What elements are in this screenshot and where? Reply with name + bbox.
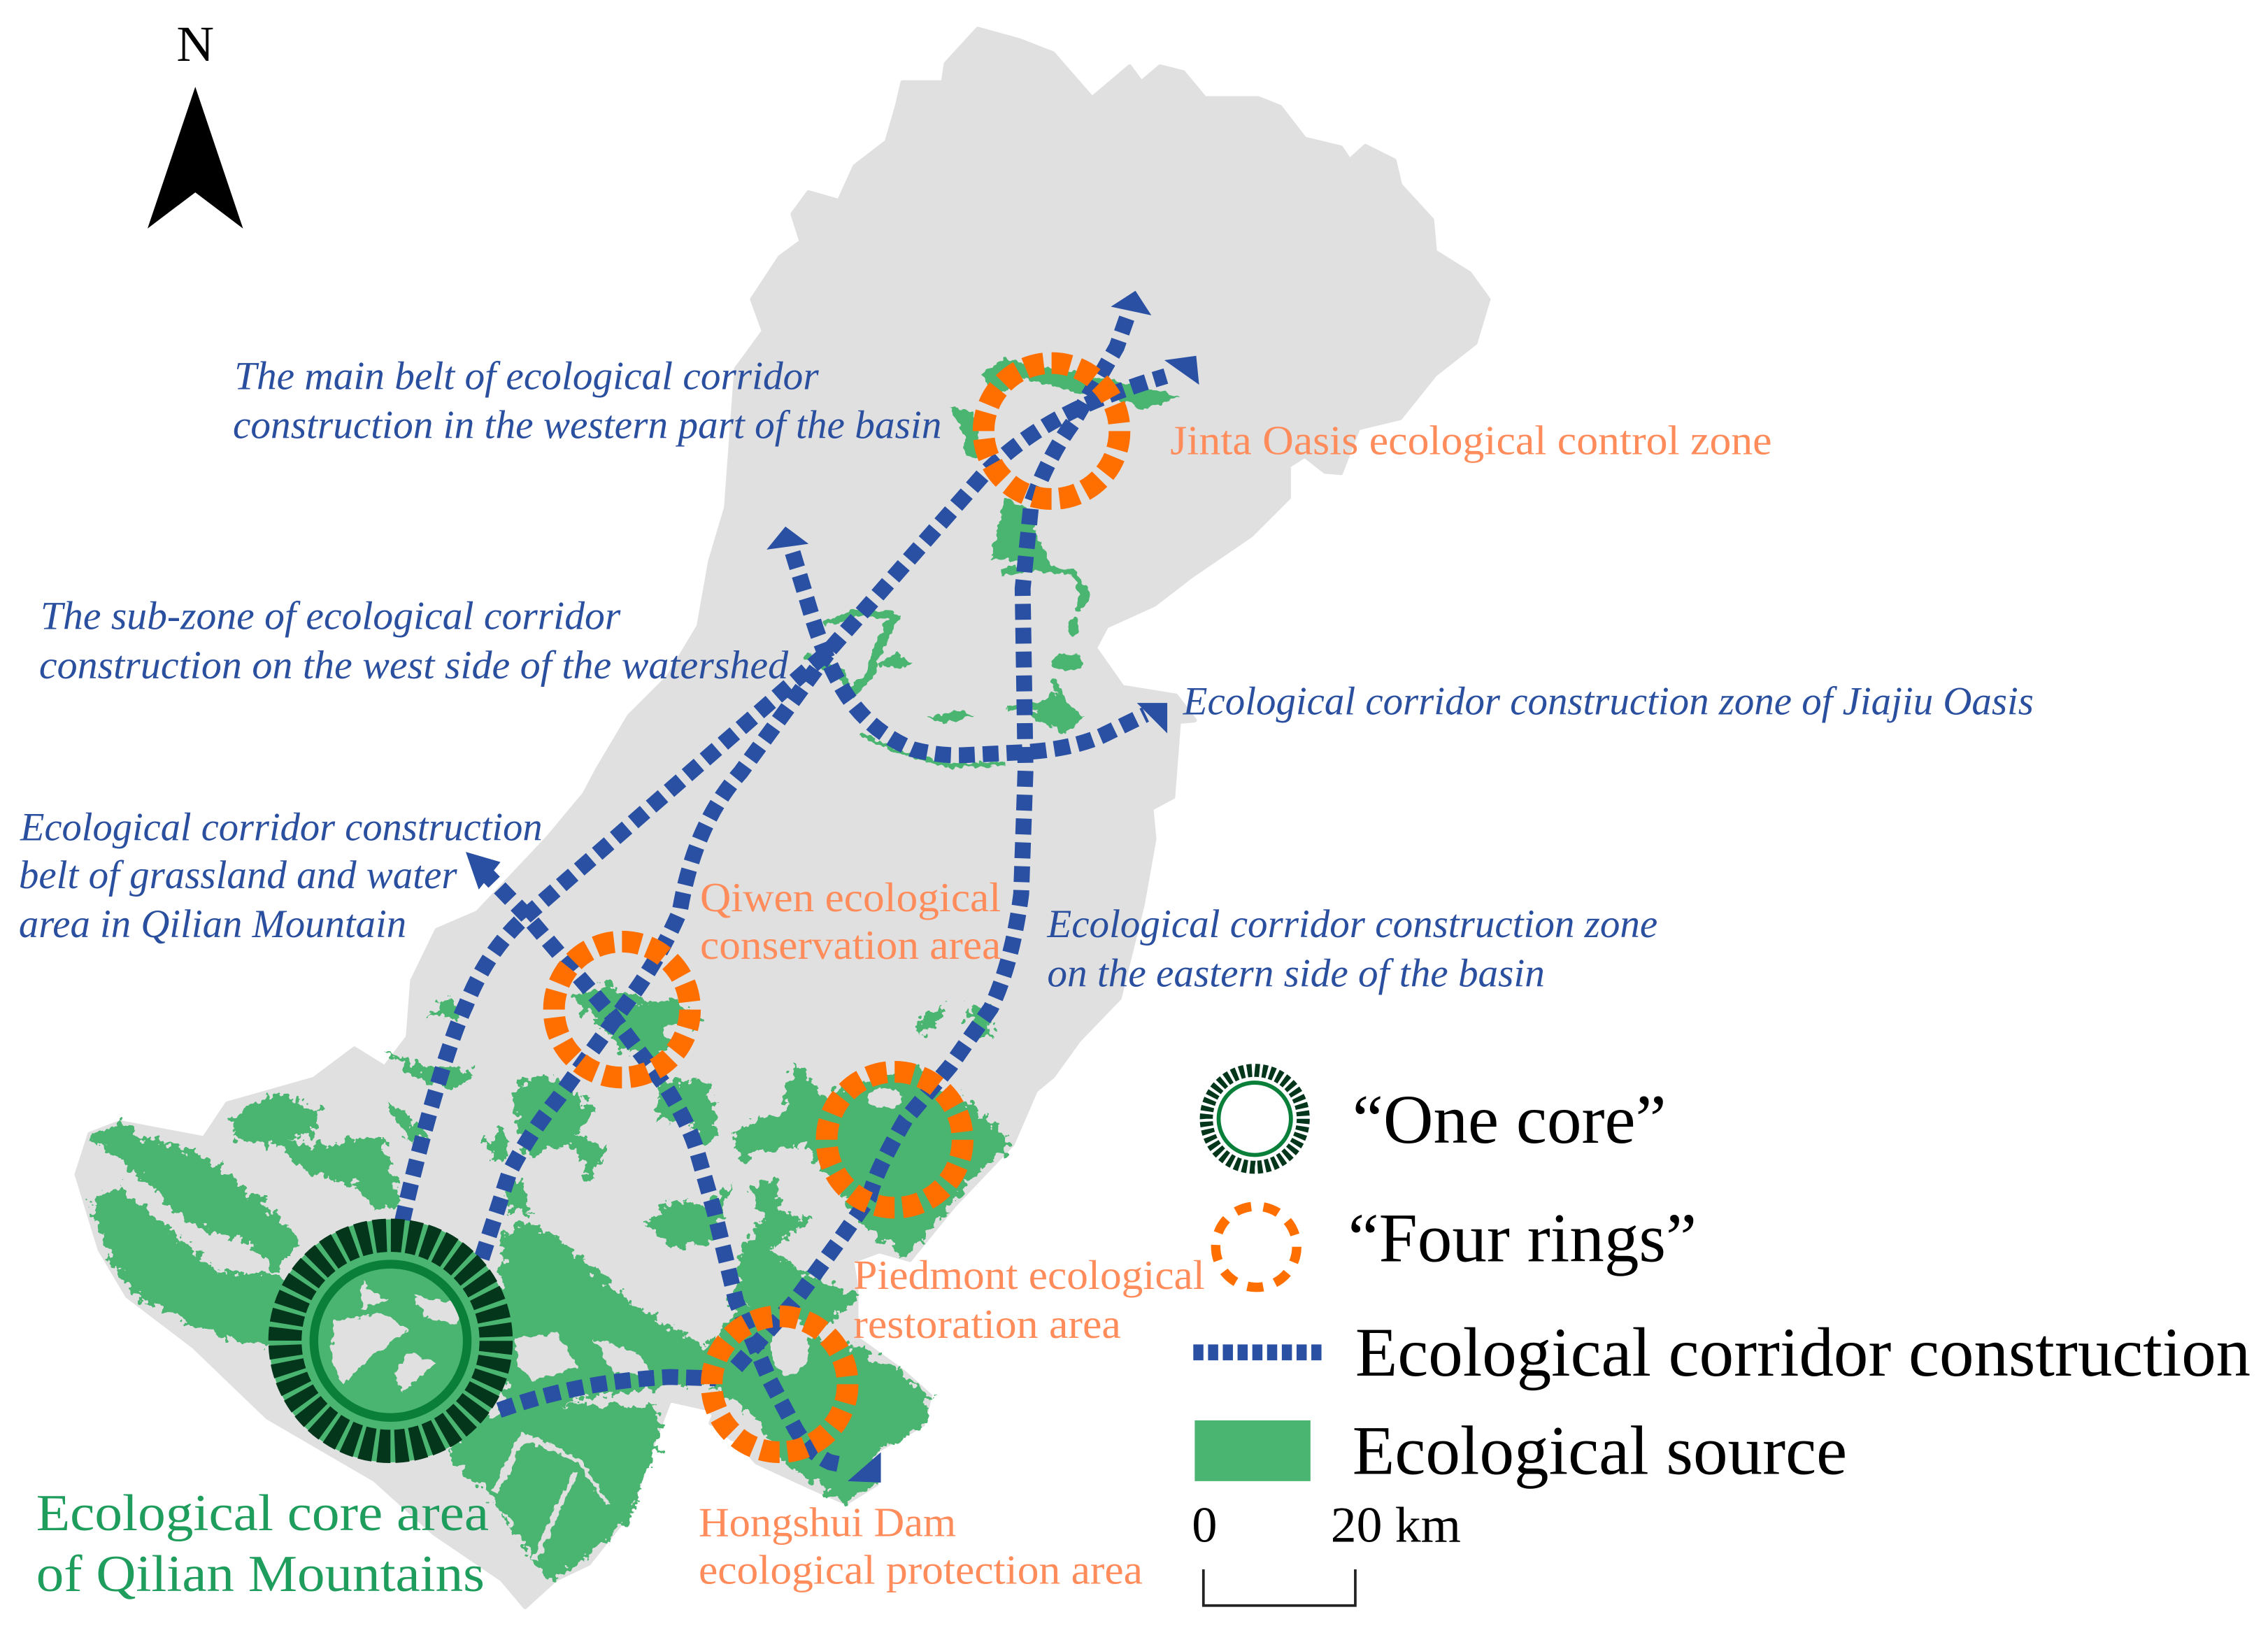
label: ecological core area: Ecological core area	[36, 1485, 489, 1542]
label: grassland and water belt: Ecological corridor construction	[20, 806, 543, 850]
label: grassland and water belt: area in Qilian Mountain	[19, 902, 406, 946]
label: sub-zone west of watershed: The sub-zone of ecological corridor	[41, 594, 621, 639]
label: main belt western basin: The main belt of ecological corridor	[234, 354, 819, 398]
four rings: Hongshui Dam ring	[712, 1316, 848, 1452]
legend: ecological corridor construction: Ecological corridor construction	[1355, 1315, 2251, 1391]
label: eastern basin corridor zone: on the eastern side of the basin	[1047, 952, 1545, 996]
one core: Qilian Mountains core ring	[269, 1219, 512, 1462]
legend: one core	[1206, 1070, 1667, 1167]
label: Qiwen conservation area: Qiwen ecological	[700, 874, 1001, 920]
four rings: Piedmont ring	[827, 1072, 962, 1208]
finer oasis patches	[806, 359, 1181, 765]
label: ecological core area: of Qilian Mountains	[36, 1546, 485, 1603]
icon: north arrow	[148, 16, 243, 229]
label: main belt western basin	[233, 354, 941, 448]
label: Piedmont restoration area	[853, 1252, 1205, 1347]
legend: four rings	[1215, 1200, 1697, 1288]
map: grey gaps inside ecological sources	[173, 1024, 903, 1560]
map: study area basin outline	[77, 29, 1488, 1607]
label: Hongshui Dam protection area: ecological protection area	[699, 1547, 1143, 1593]
corridors: ecological corridor construction lines	[402, 318, 1166, 1465]
label: Hongshui Dam protection area	[699, 1499, 1143, 1593]
scale bar	[1192, 1497, 1461, 1606]
map: ecological source patches	[90, 359, 1181, 1583]
label: main belt western basin: construction in the western part of the basin	[233, 404, 941, 448]
label: Piedmont restoration area: restoration area	[853, 1301, 1121, 1347]
four rings: Jinta Oasis ring	[983, 363, 1120, 499]
label: Jiajiu Oasis corridor zone: Ecological corridor construction zone of Jiajiu Oasis	[1183, 680, 2034, 724]
label: Jinta Oasis control zone: Jinta Oasis ecological control zone	[1170, 417, 1772, 463]
label: Hongshui Dam protection area: Hongshui Dam	[699, 1499, 956, 1545]
label: Piedmont restoration area: Piedmont ecological	[853, 1252, 1205, 1298]
four rings: Qiwen ring	[554, 941, 690, 1078]
label: sub-zone west of watershed	[39, 594, 789, 687]
icon: north arrow: N	[176, 16, 214, 72]
label: Qiwen conservation area: conservation area	[700, 922, 1001, 968]
label: ecological core area	[36, 1485, 489, 1603]
label: sub-zone west of watershed: construction on the west side of the watershed	[39, 643, 789, 687]
legend	[1193, 1070, 2251, 1489]
scale bar: 0	[1192, 1497, 1217, 1553]
scale bar: 20 km	[1331, 1497, 1461, 1553]
legend: one core: “One core”	[1353, 1082, 1667, 1158]
legend: four rings: “Four rings”	[1348, 1200, 1697, 1276]
label: grassland and water belt: belt of grassland and water	[19, 853, 457, 897]
label: eastern basin corridor zone	[1046, 902, 1657, 996]
label: Qiwen conservation area	[700, 874, 1001, 968]
label: eastern basin corridor zone: Ecological corridor construction zone	[1046, 902, 1657, 946]
corridors: arrowheads	[466, 291, 1199, 1483]
legend: ecological source: Ecological source	[1353, 1413, 1847, 1489]
label: grassland and water belt	[19, 806, 543, 946]
